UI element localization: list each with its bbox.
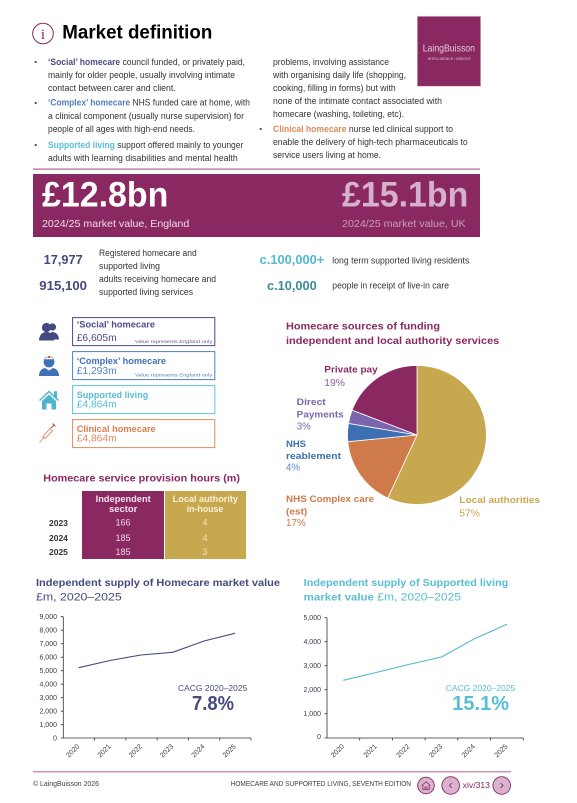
title: Market definition: [62, 22, 212, 43]
card: clinical homecare: £4,864m: [77, 433, 117, 445]
text block: market definitions right column: enable the delivery of high-tech pharmaceuticals to: [273, 137, 468, 147]
text block: market definitions right column: none of the intimate contact associated with: [273, 96, 442, 106]
table: service provision hours: 166: [115, 518, 131, 528]
label: direct payments: 3%: [297, 421, 311, 432]
text block: market definitions left column: ‘Social’ homecare council funded, or privately paid,: [48, 57, 245, 67]
line chart: homecare market value: 2022: [128, 743, 144, 759]
icon: syringe: [40, 424, 56, 442]
stat: live-in care: c.10,000: [267, 279, 317, 293]
table: service provision hours: [49, 491, 246, 559]
stat: adults receiving services: 915,100: [39, 279, 87, 293]
table: service provision hours: Independent: [96, 494, 151, 504]
text block: market definitions left column: a clinical component (usually nurse supervision) for: [48, 111, 244, 121]
line chart: supported living market value: 2,000: [303, 687, 321, 694]
text block: market definitions left column: Supported living support offered mainly to younger: [48, 140, 243, 150]
heading: supported living market value chart: Independent supply of Supported living: [304, 577, 508, 589]
callout: homecare CAGR: CACG 2020–2025: [178, 683, 248, 693]
label: local authorities: Local authorities: [459, 495, 540, 506]
card: complex homecare: £1,293m: [77, 365, 117, 377]
line chart: supported living market value: 1,000: [303, 711, 321, 718]
text block: market definitions right column: [260, 57, 468, 160]
heading: sources of funding: [286, 320, 499, 347]
card: supported living: £4,864m: [77, 399, 117, 411]
icon: nurse: [39, 356, 59, 376]
heading: supported living market value chart: [304, 577, 508, 604]
icon: home button: [418, 777, 434, 794]
label: local authorities: 57%: [459, 509, 480, 520]
line chart: supported living market value: 2023: [428, 743, 444, 759]
heading: supported living market value chart: market value £m, 2020–2025: [304, 592, 461, 604]
table: service provision hours: 185: [115, 533, 131, 543]
line chart: supported living market value: 2025: [494, 743, 510, 759]
label: local authorities: [459, 495, 540, 520]
text block: market definitions left column: people of all ages with high-end needs.: [48, 124, 195, 134]
card: social homecare: ‘Social’ homecare: [77, 320, 155, 331]
table: service provision hours: 185: [115, 547, 131, 557]
logo: [417, 16, 481, 86]
heading: sources of funding: independent and local authority services: [286, 335, 499, 347]
stat: adults receiving services: supported living services: [99, 287, 193, 297]
icon: next button: [493, 777, 511, 794]
label: NHS complex care: NHS Complex care: [286, 494, 374, 505]
label: NHS reablement: 4%: [286, 463, 300, 474]
line chart: supported living market value: 2022: [395, 743, 412, 759]
card: complex homecare: ‘Complex’ homecare: [77, 356, 166, 367]
heading: service provision hours: Homecare service provision hours (m): [43, 473, 240, 485]
text block: market definitions right column: homecare (washing, toileting, etc).: [273, 109, 404, 119]
line chart: supported living market value: 0: [317, 734, 321, 741]
line chart: homecare market value: 3,000: [39, 695, 57, 702]
line chart: homecare market value: 2025: [222, 743, 238, 759]
icon: people: [39, 323, 59, 340]
line chart: homecare market value: 5,000: [39, 668, 57, 675]
line chart: homecare market value: 7,000: [39, 641, 57, 648]
icon: previous button: [442, 777, 460, 794]
stat: registered homecare: Registered homecare and: [99, 248, 197, 258]
stat: adults receiving services: adults receiving homecare and: [99, 274, 216, 284]
line chart: homecare market value: 2,000: [39, 708, 57, 716]
text block: market definitions left column: adults with learning disabilities and mental health: [48, 153, 238, 163]
text block: market definitions right column: Clinical homecare nurse led clinical support to: [273, 124, 453, 134]
line chart: homecare market value: 2023: [159, 743, 175, 759]
label: NHS reablement: [286, 439, 342, 474]
card: supported living: Supported living: [77, 390, 148, 401]
stat: supported living residents: [260, 253, 470, 267]
label: direct payments: Payments: [297, 409, 344, 420]
card: complex homecare: [73, 352, 215, 380]
card: clinical homecare: Clinical homecare: [77, 424, 156, 435]
stat: live-in care: people in receipt of live-in care: [332, 280, 449, 290]
table: service provision hours: 4: [202, 518, 208, 528]
line chart: homecare market value: 9,000: [39, 614, 57, 621]
England market value: 2024/25 market value, England: [42, 218, 189, 230]
text block: market definitions left column: mainly for older people, usually involving intimate: [48, 70, 235, 80]
text block: market definitions left column: contact between carer and client.: [48, 83, 176, 93]
table: service provision hours: 2023: [49, 518, 68, 528]
line chart: supported living market value: 5,000: [303, 615, 321, 622]
label: NHS reablement: NHS: [286, 439, 306, 450]
stat: registered homecare: supported living: [99, 261, 160, 271]
line chart: homecare market value: 8,000: [39, 628, 57, 634]
label: direct payments: [297, 397, 344, 432]
banner: market values: [33, 174, 480, 237]
label: direct payments: Direct: [297, 397, 327, 408]
card: social homecare: [73, 318, 215, 346]
icon: information: [33, 23, 53, 44]
UK market value: 2024/25 market value, UK: [342, 218, 466, 230]
stat: registered homecare: 17,977: [44, 253, 83, 267]
text block: market definitions left column: ‘Complex’ homecare NHS funded care at home, with: [48, 98, 250, 108]
line chart: homecare market value: 2020: [65, 743, 81, 759]
England market value: [42, 176, 189, 230]
callout: supported living CAGR: [446, 683, 516, 715]
callout: supported living CAGR: CACG 2020–2025: [446, 683, 516, 693]
callout: supported living CAGR: 15.1%: [452, 693, 509, 715]
stat: adults receiving services: [39, 274, 216, 297]
icon: information: i: [41, 27, 45, 43]
stat: live-in care: [267, 279, 449, 293]
logo: LaingBuisson: [423, 43, 475, 55]
footer: copyright: © LaingBuisson 2026: [33, 779, 99, 788]
line chart: supported living market value: 2021: [363, 743, 379, 759]
stat: supported living residents: long term supported living residents: [332, 255, 470, 265]
table: service provision hours: 3: [202, 547, 208, 557]
UK market value: £15.1bn: [342, 176, 468, 215]
text block: market definitions right column: with organising daily life (shopping,: [272, 70, 406, 80]
line chart: homecare market value: [39, 614, 251, 759]
table: service provision hours: 2024: [49, 533, 68, 543]
text block: market definitions right column: problems, involving assistance: [273, 57, 389, 67]
label: private pay: [324, 364, 378, 389]
line chart: homecare market value: 4,000: [39, 682, 57, 688]
card: social homecare: Value represents England only: [135, 339, 213, 345]
card: clinical homecare: [73, 420, 215, 448]
stat: registered homecare: [44, 248, 197, 271]
line chart: supported living market value: 4,000: [303, 639, 321, 646]
heading: homecare market value chart: [36, 577, 280, 604]
table: service provision hours: Local authority: [173, 494, 238, 504]
table: service provision hours: 4: [202, 533, 208, 543]
heading: sources of funding: Homecare sources of funding: [286, 320, 440, 332]
line chart: supported living market value: 2024: [461, 743, 477, 759]
line chart: homecare market value: 2021: [97, 743, 113, 759]
page number: xiv/313: [463, 781, 491, 790]
line chart: homecare market value: 2024: [191, 743, 207, 759]
icon: house: [39, 390, 59, 410]
card: supported living: [73, 386, 215, 414]
label: private pay: Private pay: [324, 364, 378, 375]
callout: homecare CAGR: 7.8%: [192, 693, 234, 715]
logo: INTELLIGENCE • INSIGHT: [428, 57, 471, 61]
text block: market definitions right column: service users living at home.: [273, 150, 381, 160]
heading: homecare market value chart: £m, 2020–2025: [36, 592, 122, 604]
label: private pay: 19%: [324, 378, 345, 389]
callout: homecare CAGR: [178, 683, 248, 715]
table: service provision hours: sector: [109, 504, 138, 514]
line chart: homecare market value: 6,000: [39, 654, 57, 662]
footer: publication title: HOMECARE AND SUPPORTED LIVING, SEVENTH EDITION: [231, 779, 411, 788]
table: service provision hours: in-house: [187, 504, 223, 514]
label: NHS complex care: (est): [286, 506, 307, 517]
line chart: supported living market value: [303, 615, 523, 759]
label: NHS reablement: reablement: [286, 451, 342, 462]
card: social homecare: £6,605m: [77, 332, 117, 344]
label: NHS complex care: 17%: [286, 518, 306, 529]
text block: market definitions left column: [35, 57, 250, 163]
line chart: supported living market value: 2020: [330, 743, 346, 759]
heading: homecare market value chart: Independent supply of Homecare market value: [36, 577, 280, 589]
card: complex homecare: Value represents England only: [135, 373, 213, 379]
pie chart: sources of funding: [347, 366, 486, 504]
text block: market definitions right column: cooking, filling in forms) but with: [273, 83, 396, 93]
stat: supported living residents: c.100,000+: [260, 253, 324, 267]
England market value: £12.8bn: [42, 176, 168, 215]
line chart: homecare market value: 0: [53, 736, 57, 742]
label: NHS complex care: [286, 494, 374, 529]
line chart: supported living market value: 3,000: [303, 663, 321, 670]
table: service provision hours: 2025: [49, 547, 68, 557]
line chart: homecare market value: 1,000: [39, 722, 57, 729]
